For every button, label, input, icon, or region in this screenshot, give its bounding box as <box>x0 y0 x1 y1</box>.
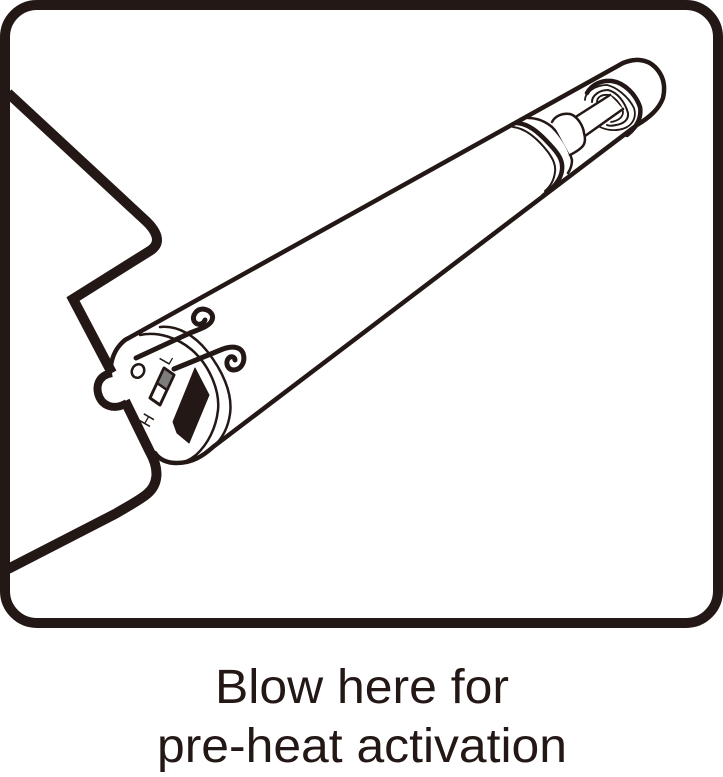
caption line 2: pre-heat activation <box>157 720 567 773</box>
icon: hand outline <box>8 93 157 569</box>
pen body outline <box>111 60 664 463</box>
caption <box>157 661 567 773</box>
collar <box>552 114 585 155</box>
mouthpiece slot <box>173 368 209 443</box>
stem <box>574 95 623 136</box>
mouth-end rings <box>160 327 230 447</box>
airflow arrow lower <box>174 347 244 370</box>
panel frame <box>5 5 718 623</box>
caption line 1: Blow here for <box>215 661 509 714</box>
switch label H: H <box>136 410 159 430</box>
switch <box>150 368 174 405</box>
tube divider band <box>517 123 562 196</box>
switch label L: L <box>156 350 177 368</box>
socket rings <box>587 81 640 135</box>
O mark <box>129 362 147 380</box>
airflow arrow upper <box>136 309 213 358</box>
icon: vaporizer pen <box>111 60 664 463</box>
